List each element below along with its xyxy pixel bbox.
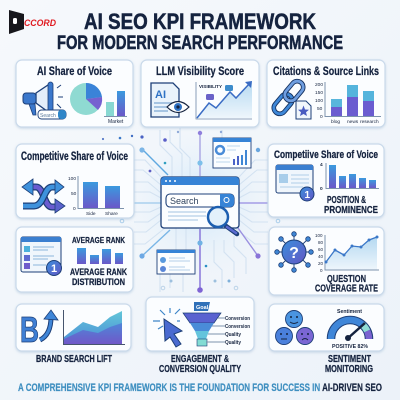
line chart: coverage: 40 [318, 254, 324, 259]
mini dashboard top [213, 138, 251, 168]
caption: Sentiment Monitoring: MONITORING [325, 363, 373, 375]
line chart: coverage: 60 [318, 247, 324, 252]
title [57, 9, 343, 54]
stacked bar chart: 100 [315, 98, 323, 104]
sentiment gauge: Sentiment [337, 309, 362, 315]
search bar: Search [170, 196, 199, 206]
bar chart: side vs share: 50 [71, 191, 77, 197]
logo: Accord [9, 10, 56, 34]
line chart: coverage: 0 [320, 268, 323, 273]
stacked bar chart [315, 82, 381, 125]
label: average rank: AVERAGE RANK [72, 235, 126, 245]
stacked bar chart: 0 [320, 114, 323, 120]
panel: Sentiment Monitoring [269, 304, 384, 351]
icon: AI document with eye: AI [155, 89, 166, 101]
funnel labels: Conversion [225, 324, 250, 330]
funnel labels [206, 316, 250, 346]
icon: crossing arrows [22, 179, 65, 213]
bar chart: side vs share [68, 176, 124, 217]
line chart: coverage [315, 233, 379, 273]
panel: Average Rank [16, 227, 133, 292]
label: average rank distribution [70, 267, 127, 288]
icon: logo door [9, 10, 24, 34]
funnel labels: Quality [225, 340, 241, 346]
bar chart: side vs share: 0 [73, 206, 76, 212]
bar chart: side vs share: 100 [68, 176, 76, 182]
stacked bar chart: 150 [315, 90, 323, 96]
area chart [64, 310, 125, 344]
caption: Engagement & Conversion Quality [159, 353, 241, 375]
panel: Engagement & Conversion Quality [146, 297, 254, 351]
line chart: coverage: 100 [315, 233, 323, 238]
stacked bar chart: news [347, 120, 359, 125]
search pill: Search [40, 113, 56, 119]
caption: Engagement & Conversion Quality: ENGAGEMENT & [171, 353, 229, 365]
panel: Citations & Source Links [267, 60, 385, 127]
funnel labels: Conversion [225, 316, 250, 322]
icon: browser ranking badge: 1 [304, 190, 310, 201]
line chart: visibility: VISIBILITY [199, 84, 222, 89]
label: average rank distribution: DISTRIBUTION [72, 277, 125, 288]
label [315, 273, 378, 294]
stacked bar chart: research [360, 119, 379, 125]
stacked bar chart: 200 [315, 82, 323, 88]
stacked bar chart: blog [331, 119, 340, 125]
heading: AI Share of Voice [37, 64, 112, 78]
icon: starred document [296, 101, 311, 119]
pie chart [70, 83, 102, 115]
logo wordmark: CCORD [24, 18, 56, 29]
bar chart: position: 4 [320, 162, 323, 168]
label: average rank distribution: AVERAGE RANK [70, 267, 127, 278]
bar chart: market: Market [108, 119, 124, 125]
stacked bar chart: 50 [317, 106, 323, 112]
circuit network background [102, 128, 280, 293]
bar chart: rank [77, 248, 123, 264]
icon: chain link [271, 79, 306, 116]
mini dashboard bottom [157, 250, 195, 274]
bar chart: side vs share: Side [86, 211, 96, 217]
label: QUESTION [327, 273, 366, 285]
line chart: coverage: 20 [318, 261, 324, 266]
sentiment gauge [331, 309, 369, 350]
label: POSITION & [327, 194, 366, 206]
icon: B with arrow: B [20, 309, 39, 350]
icon: click cursor [153, 308, 182, 347]
heading: LLM Visibility Score [156, 64, 244, 78]
caption: Engagement & Conversion Quality: CONVERSION QUALITY [159, 363, 241, 375]
title line 1: AI SEO KPI FRAMEWORK [84, 9, 317, 34]
panel: Competitive Share of Voice (left) [16, 144, 134, 218]
bar chart: position: 0 [320, 186, 323, 192]
panel: Question Coverage Rate [269, 227, 384, 295]
icon: sentiment faces [276, 310, 314, 344]
panel: Brand Search Lift [16, 304, 131, 351]
caption: Brand Search Lift: BRAND SEARCH LIFT [36, 354, 112, 365]
sentiment gauge: POSITIVE 82% [332, 344, 368, 350]
panel: Competitive Share of Voice / Position & Prominence [268, 144, 384, 217]
central search window [161, 177, 239, 234]
funnel labels: Quality [225, 332, 241, 338]
caption: Sentiment Monitoring: SENTIMENT [328, 353, 371, 365]
panel: AI Share of Voice [16, 60, 133, 127]
icon: browser ranking list: 1 [51, 263, 57, 275]
line chart: coverage: 80 [318, 240, 324, 245]
panel: LLM Visibility Score [141, 60, 259, 127]
icon: conversion funnel: Goal [196, 305, 209, 311]
heading: Competitive Share of Voice [21, 151, 128, 163]
label line 2: PROMINENCE [324, 204, 378, 216]
caption: Sentiment Monitoring [325, 353, 373, 375]
bar chart: side vs share: Share [105, 211, 118, 217]
bar chart: position [320, 162, 379, 192]
icon: question network: ? [289, 245, 299, 262]
icon: megaphone [23, 82, 63, 115]
icon: magnifying glass [208, 207, 237, 234]
